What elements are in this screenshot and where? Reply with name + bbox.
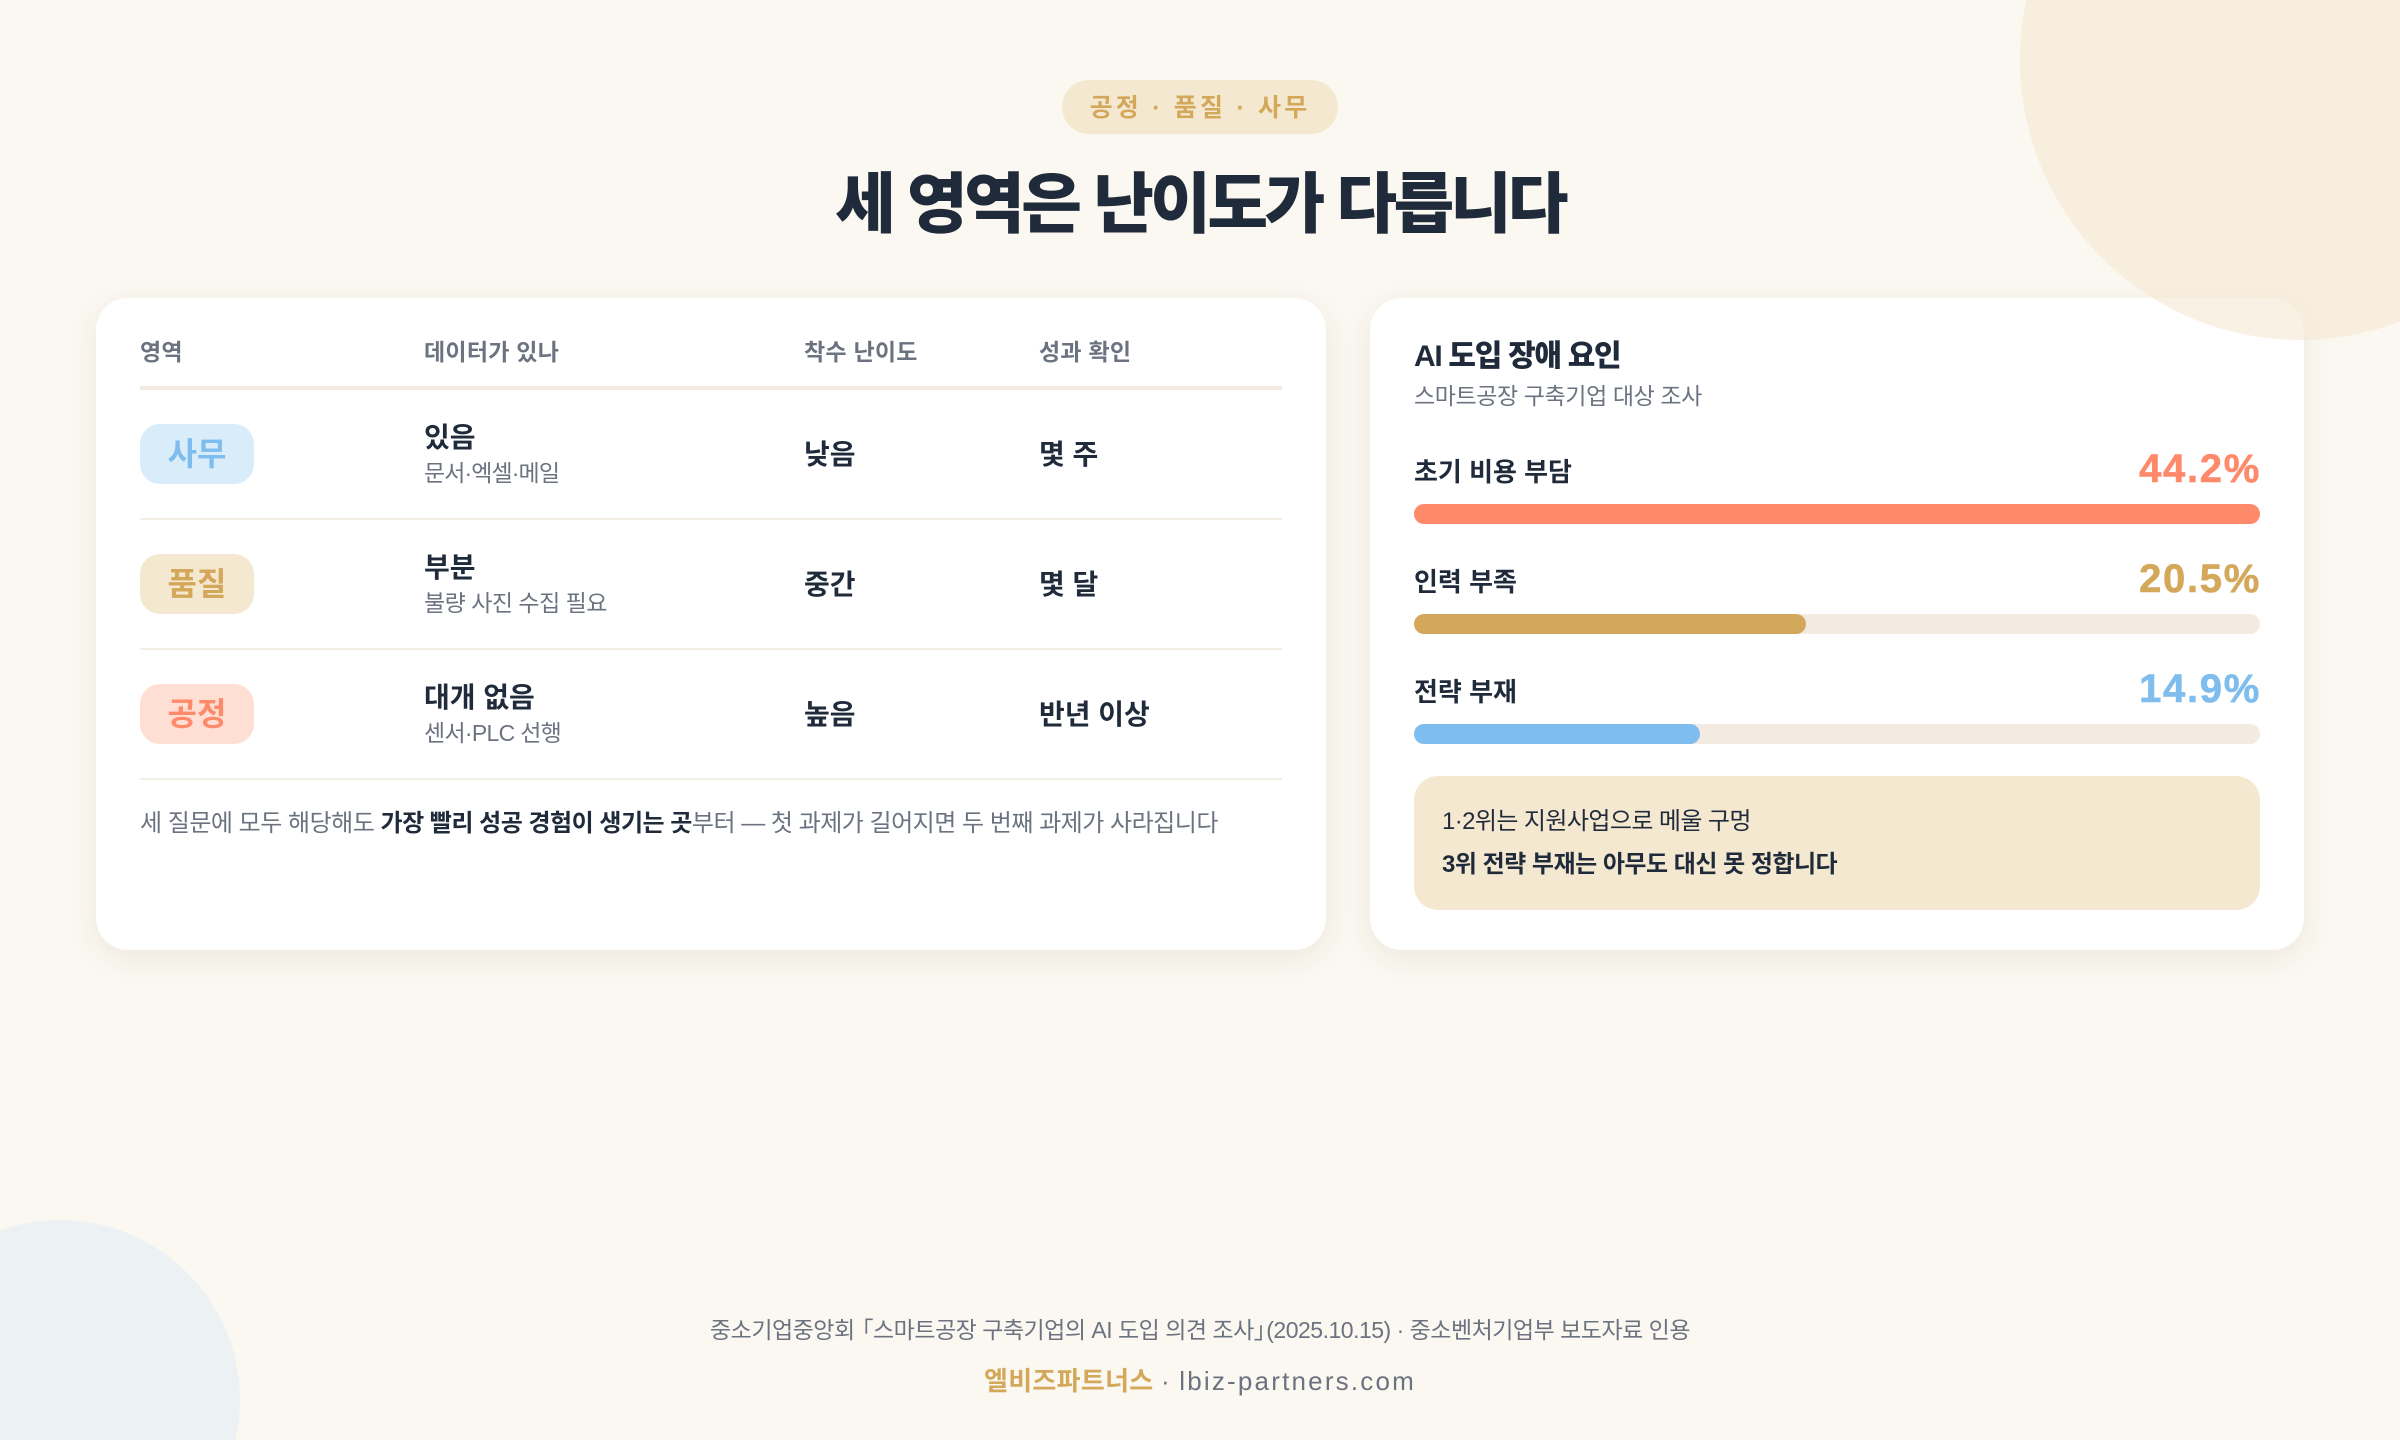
column heading: difficulty: 착수 난이도 — [804, 339, 918, 365]
callout line 1: 1·2위는 지원사업으로 메울 구멍 — [1442, 808, 1751, 835]
data availability: 있음 — [424, 422, 476, 453]
difficulty: 낮음 — [804, 439, 856, 470]
badge: quality: 품질 — [168, 566, 226, 602]
decorative circle: bottom left — [0, 1220, 240, 1440]
time to results: 몇 달 — [1039, 569, 1098, 600]
time to results: 반년 이상 — [1039, 699, 1150, 730]
label: cost: 초기 비용 부담 — [1414, 457, 1572, 487]
data availability: 대개 없음 — [424, 682, 535, 713]
label: workforce: 인력 부족 — [1414, 567, 1517, 597]
decorative circle: top right — [2020, 0, 2400, 340]
badge: process: 공정 — [168, 696, 226, 732]
title: 세 영역은 난이도가 다릅니다 — [835, 167, 1565, 241]
category pill — [1062, 80, 1338, 134]
bar: cost — [1414, 504, 2260, 524]
badge: quality — [140, 554, 254, 614]
callout — [1414, 776, 2260, 910]
badge: office: 사무 — [168, 436, 226, 472]
callout line 2: 3위 전략 부재는 아무도 대신 못 정합니다 — [1442, 851, 1837, 878]
source citation: 중소기업중앙회 「스마트공장 구축기업의 AI 도입 의견 조사」(2025.10.15) · 중소벤처기업부 보도자료 인용 — [710, 1317, 1690, 1343]
panel heading: AI 도입 장애 요인 — [1414, 340, 1620, 373]
data detail: 센서·PLC 선행 — [424, 720, 561, 746]
bar: workforce — [1414, 614, 2260, 634]
column heading: results: 성과 확인 — [1039, 339, 1131, 365]
data detail: 문서·엑셀·메일 — [424, 460, 559, 486]
time to results: 몇 주 — [1039, 439, 1098, 470]
row: process — [140, 650, 1282, 780]
category pill: 공정 · 품질 · 사무 — [1090, 94, 1310, 122]
label: strategy: 전략 부재 — [1414, 677, 1517, 707]
panel subheading: 스마트공장 구축기업 대상 조사 — [1414, 383, 1702, 409]
data availability: 부분 — [424, 552, 476, 583]
panel: difficulty table — [96, 298, 1326, 950]
column heading: area: 영역 — [140, 339, 183, 365]
badge: process — [140, 684, 254, 744]
row: office — [140, 390, 1282, 520]
value: workforce: 20.5% — [2139, 557, 2261, 601]
badge: office — [140, 424, 254, 484]
row: quality — [140, 520, 1282, 650]
brand line: 엘비즈파트너스 · lbiz-partners.com — [984, 1366, 1416, 1396]
table header — [140, 298, 1282, 390]
difficulty: 높음 — [804, 699, 856, 730]
panel: AI adoption barriers — [1370, 298, 2304, 950]
column heading: data: 데이터가 있나 — [424, 339, 559, 365]
difficulty: 중간 — [804, 569, 856, 600]
value: cost: 44.2% — [2139, 447, 2261, 491]
footnote: 세 질문에 모두 해당해도 가장 빨리 성공 경험이 생기는 곳부터 — 첫 과제가 길어지면 두 번째 과제가 사라집니다 — [140, 810, 1218, 837]
data detail: 불량 사진 수집 필요 — [424, 590, 607, 616]
bar: strategy — [1414, 724, 2260, 744]
value: strategy: 14.9% — [2139, 667, 2261, 711]
